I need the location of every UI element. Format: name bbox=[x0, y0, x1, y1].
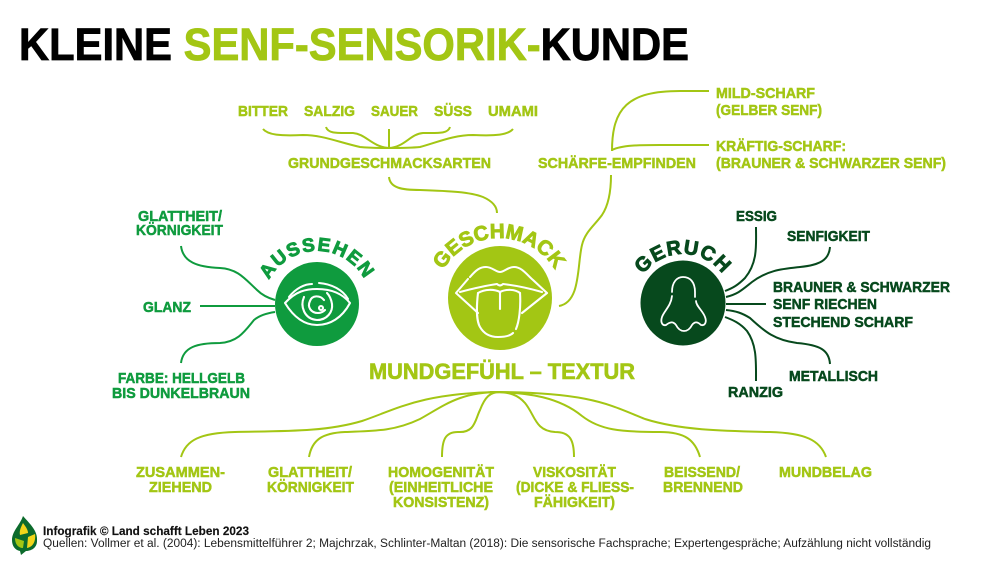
label: Homogenität bbox=[388, 464, 494, 511]
icon: nose bbox=[661, 277, 706, 331]
label: Viskosität bbox=[516, 464, 634, 511]
label: Süss: SÜSS bbox=[434, 103, 472, 120]
label: Homogenität: (EINHEITLICHE bbox=[389, 479, 493, 496]
label: Umami: UMAMI bbox=[488, 103, 538, 120]
label: Zusammenziehend: ZIEHEND bbox=[149, 479, 212, 496]
arched heading: Aussehen: AUSSEHEN bbox=[260, 237, 375, 280]
label: Homogenität: KONSISTENZ) bbox=[393, 494, 489, 511]
label: Glattheit Körnigkeit: KÖRNIGKEIT bbox=[267, 479, 354, 496]
arched heading: Geschmack: GESCHMACK bbox=[434, 223, 568, 270]
group: Aussehen bbox=[112, 208, 375, 402]
label: Brauner und schwarzer: BRAUNER & SCHWARZER bbox=[773, 279, 950, 296]
heading: Schärfe-Empfinden: SCHÄRFE-EMPFINDEN bbox=[538, 155, 696, 172]
label: Glattheit Körnigkeit: GLATTHEIT/ bbox=[268, 464, 353, 481]
group: Mundgefühl bbox=[136, 359, 872, 511]
label: Viskosität: FÄHIGKEIT) bbox=[534, 494, 615, 511]
connector to kräftig bbox=[612, 145, 709, 150]
connector to Geschmack bbox=[389, 177, 497, 213]
label: gelber senf: (GELBER SENF) bbox=[716, 102, 822, 119]
credit line: Infografik © Land schafft Leben 2023 bbox=[43, 526, 249, 538]
brace connecting tastes bbox=[263, 127, 513, 148]
label: Körnigkeit: KÖRNIGKEIT bbox=[136, 222, 223, 239]
label: mild-scharf: MILD-SCHARF bbox=[716, 85, 815, 102]
connectors bbox=[181, 392, 826, 457]
group: Grundgeschmacksarten bbox=[238, 103, 538, 213]
connectors bbox=[725, 227, 830, 381]
label: Beissend Brennend: BRENNEND bbox=[663, 479, 743, 496]
label: Salzig: SALZIG bbox=[304, 103, 355, 120]
label: Essig: ESSIG bbox=[736, 208, 777, 225]
connector to mild bbox=[612, 91, 709, 151]
label: Sauer: SAUER bbox=[371, 103, 418, 120]
label: kräftig-scharf: KRÄFTIG-SCHARF: bbox=[716, 138, 846, 155]
label: Farbe: FARBE: HELLGELB bbox=[118, 370, 245, 387]
connectors bbox=[181, 246, 275, 363]
circle: Geschmack bbox=[448, 246, 552, 350]
label: Glanz: GLANZ bbox=[143, 299, 191, 316]
label: Homogenität: HOMOGENITÄT bbox=[388, 464, 494, 481]
title: KLEINE SENF-SENSORIK-KUNDE bbox=[19, 19, 689, 70]
circle: Aussehen bbox=[275, 262, 359, 346]
label: bis dunkelbraun: BIS DUNKELBRAUN bbox=[112, 385, 250, 402]
label: Viskosität: VISKOSITÄT bbox=[533, 464, 616, 481]
heading: Grundgeschmacksarten: GRUNDGESCHMACKSARTEN bbox=[288, 155, 491, 172]
icon: leaf logo bbox=[12, 516, 37, 555]
icon: mouth with tongue bbox=[456, 267, 547, 337]
label: brauner und schwarzer senf: (BRAUNER & SCHWARZER SENF) bbox=[716, 155, 946, 172]
label: Viskosität: (DICKE & FLIESS- bbox=[516, 479, 634, 496]
label: Metallisch: METALLISCH bbox=[789, 368, 878, 385]
label: Ranzig: RANZIG bbox=[728, 384, 783, 401]
label: Beissend Brennend: BEISSEND/ bbox=[664, 464, 741, 481]
icon: eye bbox=[285, 283, 350, 325]
label: Glattheit: GLATTHEIT/ bbox=[138, 208, 223, 225]
label: Glattheit Körnigkeit bbox=[267, 464, 354, 496]
label: Zusammenziehend bbox=[136, 464, 225, 496]
label: Mundbelag: MUNDBELAG bbox=[779, 464, 872, 481]
label: Senf riechen: SENF RIECHEN bbox=[773, 296, 877, 313]
label: Stechend scharf: STECHEND SCHARF bbox=[773, 314, 913, 331]
group: Geruch bbox=[635, 208, 950, 401]
arched heading: Geruch: GERUCH bbox=[635, 240, 732, 274]
circle: Geruch bbox=[640, 260, 726, 346]
label: Bitter: BITTER bbox=[238, 103, 288, 120]
group: Geschmack bbox=[434, 223, 568, 350]
label: Senfigkeit: SENFIGKEIT bbox=[787, 228, 870, 245]
sources line: Quellen: Vollmer et al. (2004): Lebensmittelführer 2; Majchrzak, Schlinter-Maltan (2018): Die sensorische Fachsprache; Expertengespräche; Aufzählung nicht vollständig bbox=[43, 538, 931, 550]
label: Zusammenziehend: ZUSAMMEN- bbox=[136, 464, 225, 481]
label: Beissend Brennend bbox=[663, 464, 743, 496]
group: Schärfe-Empfinden bbox=[538, 85, 946, 306]
connector to Geschmack bbox=[559, 175, 611, 306]
heading: Mundgefühl Textur: MUNDGEFÜHL – TEXTUR bbox=[369, 359, 635, 384]
